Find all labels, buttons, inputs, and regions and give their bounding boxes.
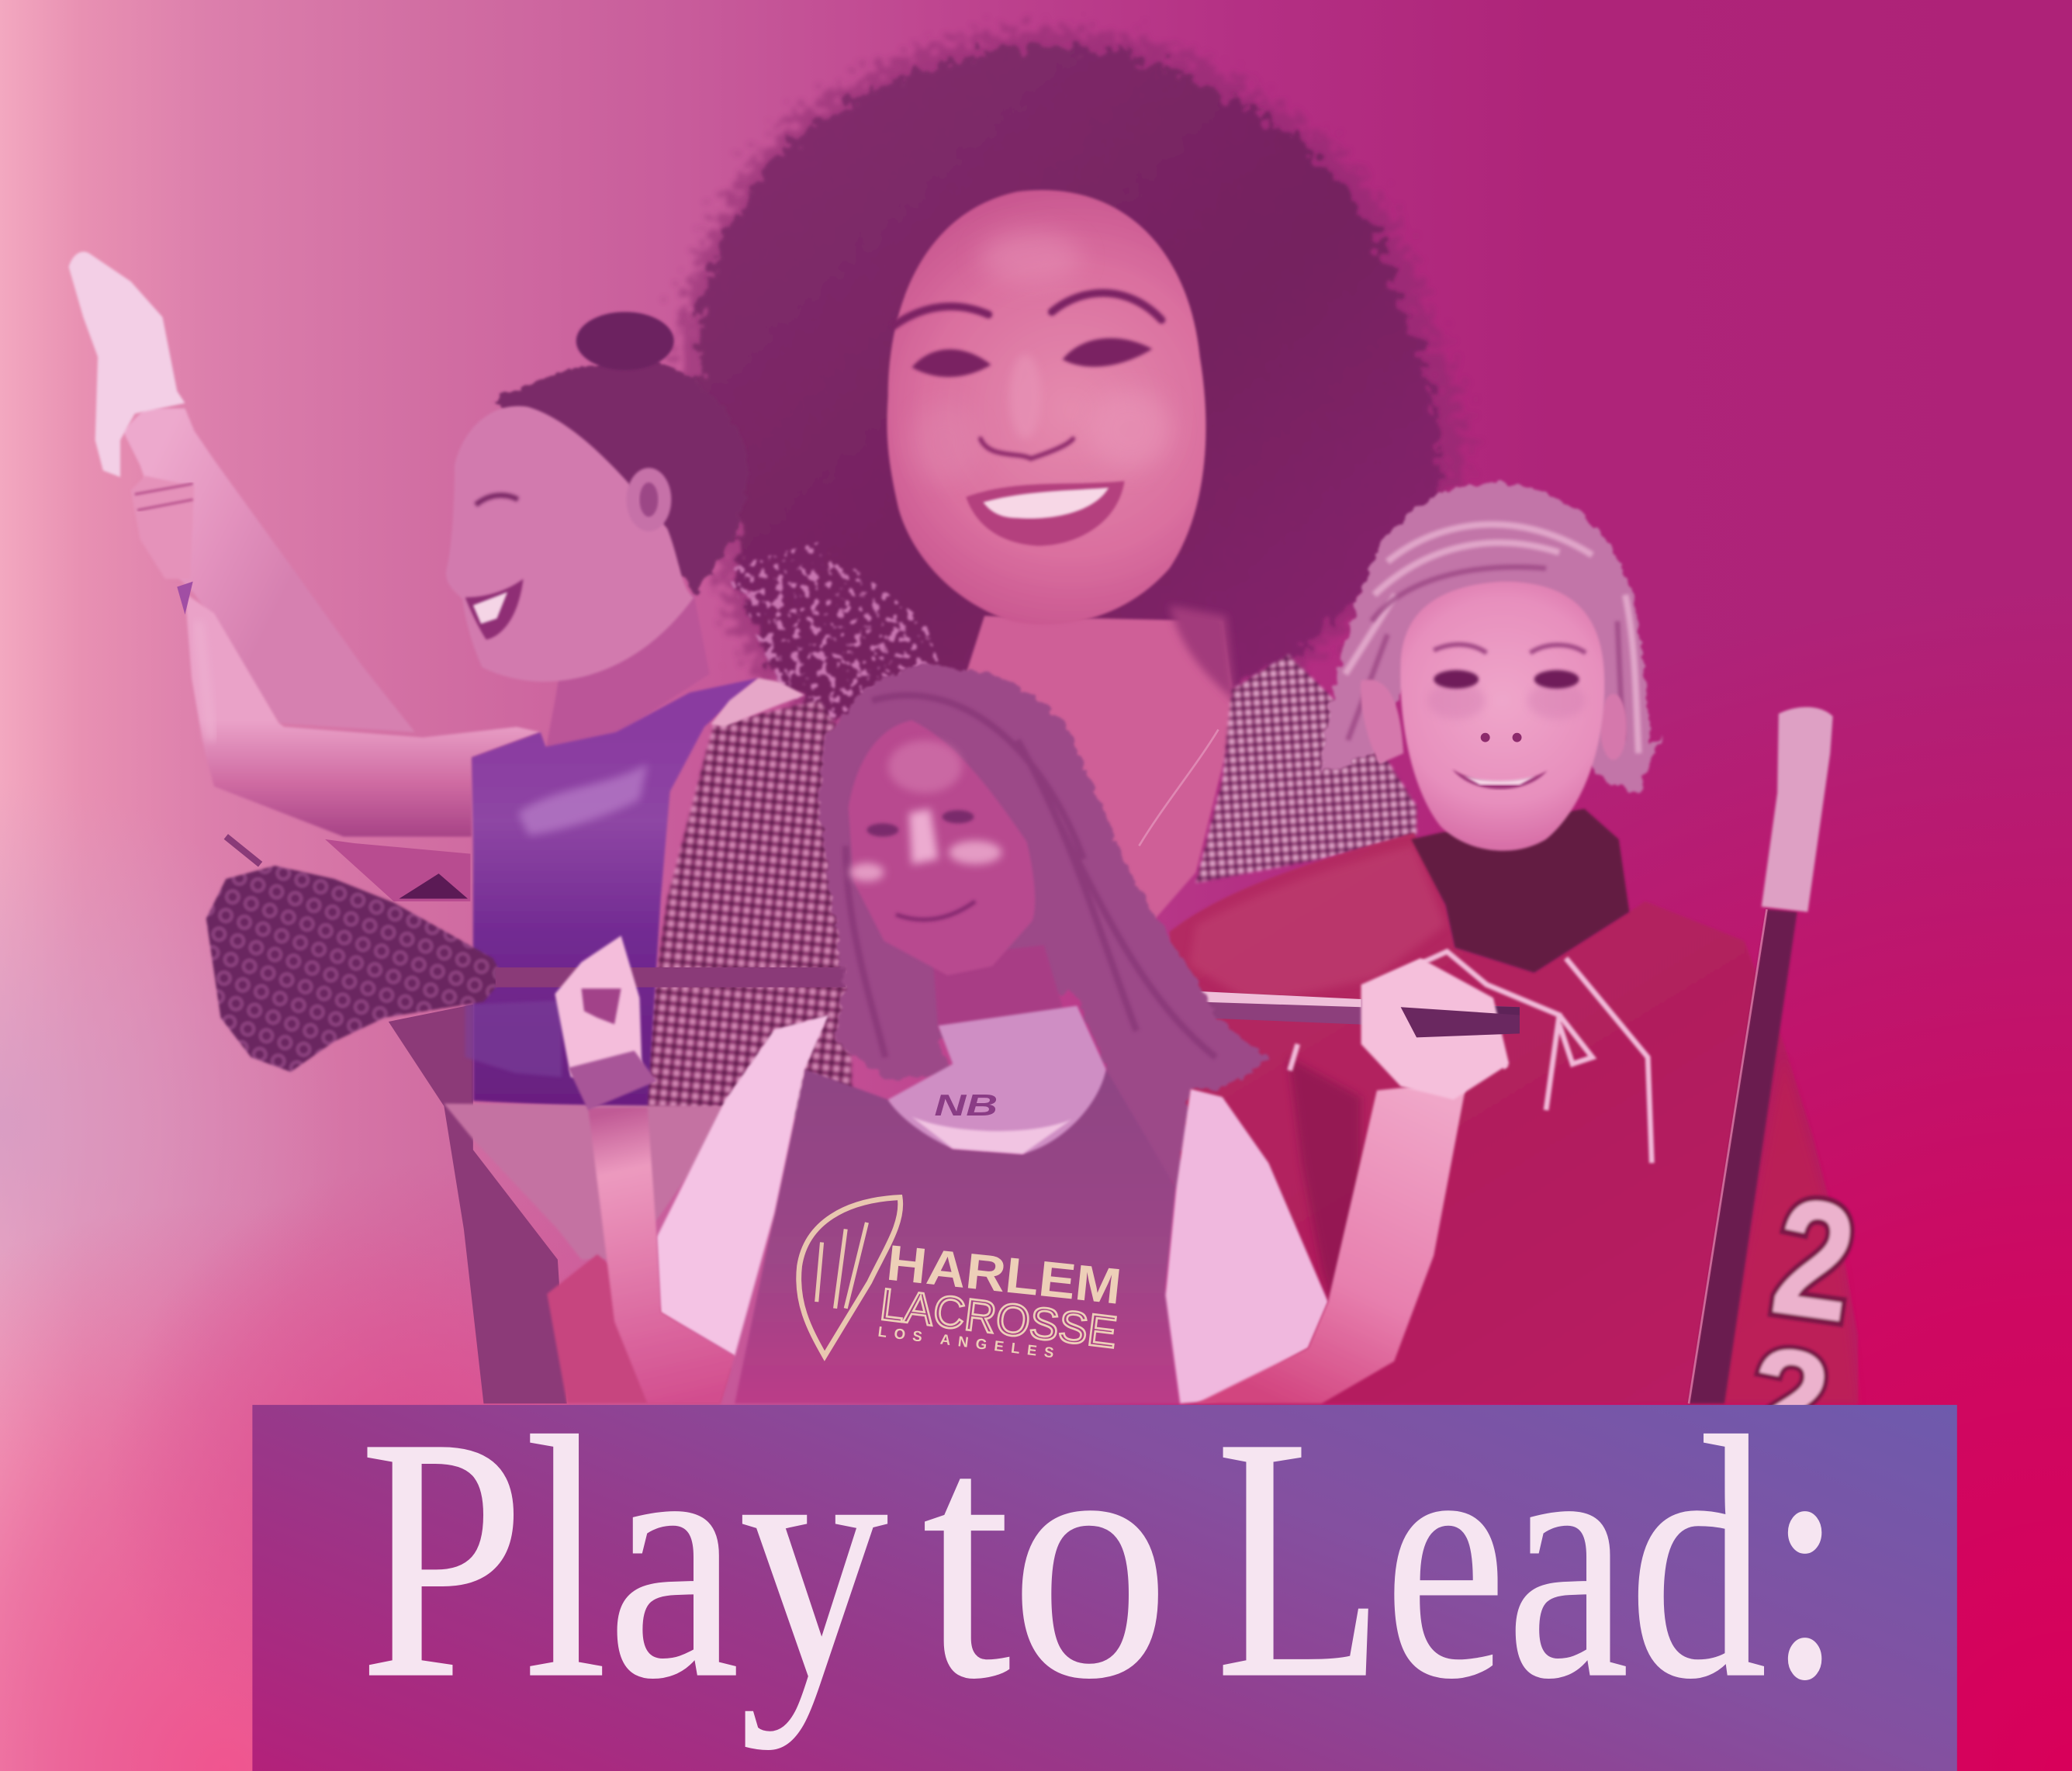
hockey ears — [1361, 680, 1403, 764]
gymnast hair — [492, 359, 748, 593]
photo: hockey kid — [1170, 483, 1866, 1481]
lacrosse stick — [206, 836, 1520, 1072]
girl left hand — [555, 936, 642, 1077]
girl right hand — [1361, 958, 1509, 1100]
gymnast face — [446, 406, 694, 682]
girl jersey — [735, 1069, 1180, 1403]
collar logo: NB — [934, 1089, 998, 1122]
jersey text — [877, 1234, 1124, 1361]
jersey text: LOS ANGELES — [877, 1323, 1055, 1361]
girl hair tie — [568, 1050, 657, 1110]
jersey text: HARLEM — [884, 1234, 1124, 1315]
woman blazer right lapel — [1196, 654, 1417, 883]
woman hair — [677, 29, 1463, 740]
hockey neck warmer — [1411, 809, 1629, 973]
woman blazer left — [642, 700, 853, 1117]
gymnast raised leg — [123, 408, 415, 732]
woman neck and chest — [911, 616, 1236, 925]
hockey face — [1400, 582, 1604, 851]
title text: Lead: — [1216, 1366, 1843, 1750]
gymnast hand — [131, 476, 194, 579]
gymnast neck — [546, 593, 710, 749]
hockey nose — [1481, 733, 1490, 742]
girl face — [849, 721, 1035, 975]
gymnast far shoulder — [711, 678, 804, 727]
girl undershirt collar — [888, 1006, 1106, 1154]
title text: Play — [359, 1366, 888, 1750]
girl hair — [819, 663, 1270, 1188]
gymnast bun — [576, 312, 674, 370]
hockey stick — [1689, 707, 1833, 1403]
girl left sleeve — [657, 1015, 828, 1356]
gymnast leotard — [472, 678, 759, 1110]
photo: gymnast girl — [69, 252, 804, 1403]
woman smile — [966, 481, 1125, 546]
gymnast thigh — [325, 839, 470, 901]
hockey laces and stripes — [1290, 952, 1652, 1163]
gymnast lower body — [389, 1005, 567, 1403]
title text: to — [922, 1366, 1170, 1750]
title panel — [252, 1366, 1957, 1771]
clipboard — [444, 1104, 731, 1260]
hockey sleeve number — [1740, 1162, 1866, 1481]
hockey hair — [1321, 483, 1662, 793]
hockey sleeve number: 2 — [1763, 1162, 1866, 1357]
hockey eyes — [1427, 682, 1486, 719]
girl left forearm — [588, 1108, 735, 1403]
gymnast wristband — [177, 582, 193, 614]
gymnast arm — [185, 593, 541, 836]
gymnast sock — [69, 252, 185, 477]
girl right sleeve — [1165, 1089, 1328, 1403]
woman nose — [981, 439, 1073, 458]
jersey logo — [799, 1198, 1124, 1361]
woman eyes — [911, 338, 1152, 377]
gymnast leotard logo — [465, 1001, 562, 1077]
hockey sleeve number: 2 — [1740, 1316, 1839, 1481]
stick shaft — [496, 967, 846, 988]
jersey text: LACROSSE — [877, 1280, 1119, 1358]
woman brows — [894, 293, 1161, 325]
photo: lacrosse girl — [555, 663, 1520, 1403]
stick head — [206, 866, 503, 1072]
woman face — [887, 190, 1205, 625]
title text — [359, 1366, 1843, 1750]
girl neck — [933, 945, 1064, 1031]
hand holding clipboard — [547, 1254, 731, 1403]
girl right forearm — [1196, 1081, 1467, 1403]
hockey jersey — [1170, 832, 1858, 1403]
hockey smile — [1452, 770, 1548, 789]
photo: smiling woman — [642, 29, 1463, 1117]
